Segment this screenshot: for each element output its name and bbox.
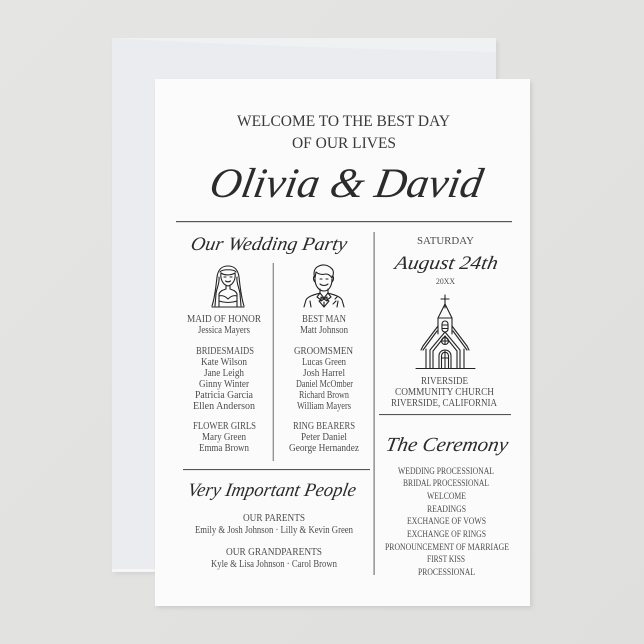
party column divider (273, 263, 274, 461)
panel: wedding party (187, 234, 360, 461)
column: groom's side: GROOMSMEN (294, 346, 353, 357)
column: bride's side: FLOWER GIRLS (193, 421, 256, 432)
date: SATURDAY (417, 235, 474, 247)
venue (391, 376, 498, 409)
venue: RIVERSIDE (421, 376, 468, 387)
column: groom's side: George Hernandez (289, 443, 360, 454)
family names: Kyle & Lisa Johnson · Carol Brown (211, 559, 337, 570)
date: 20XX (436, 277, 455, 286)
date: August 24th (391, 253, 500, 274)
ceremony order list: EXCHANGE OF RINGS (407, 529, 486, 539)
ceremony order list: WEDDING PROCESSIONAL (398, 466, 494, 476)
date (391, 235, 500, 286)
venue rule (379, 414, 511, 415)
family names (195, 513, 353, 570)
column: bride's side: Patricia Garcia (195, 390, 254, 401)
center column divider (374, 232, 375, 575)
ceremony order list: WELCOME (427, 491, 466, 501)
column: groom's side: Peter Daniel (301, 432, 347, 443)
column: groom's side: Josh Harrel (303, 368, 345, 379)
ceremony order list: PROCESSIONAL (418, 567, 475, 577)
ceremony order list: EXCHANGE OF VOWS (407, 516, 486, 526)
column: bride's side: Ginny Winter (199, 379, 250, 390)
column: bride's side: BRIDESMAIDS (196, 346, 254, 357)
icon: groom (304, 265, 344, 307)
ceremony order list: READINGS (427, 504, 466, 514)
icon: church (416, 295, 475, 368)
ceremony order list: PRONOUNCEMENT OF MARRIAGE (385, 542, 509, 552)
column: bride's side: MAID OF HONOR (187, 314, 261, 325)
welcome heading: OF OUR LIVES (292, 135, 396, 152)
column: groom's side: BEST MAN (302, 314, 346, 325)
column: groom's side: Matt Johnson (300, 325, 348, 336)
column: groom's side: Richard Brown (299, 390, 349, 401)
family names: OUR PARENTS (243, 513, 305, 524)
header rule (176, 221, 512, 222)
heading: the ceremony: The Ceremony (384, 434, 510, 456)
panel: the ceremony (384, 434, 510, 577)
column: groom's side: Daniel McOmber (296, 379, 354, 390)
panel: date and venue (391, 235, 500, 409)
ceremony order list: FIRST KISS (427, 554, 465, 564)
envelope behind card (112, 38, 498, 574)
column: bride's side: Mary Green (202, 432, 246, 443)
column: bride's side (187, 314, 261, 454)
ceremony order list (385, 466, 509, 577)
ceremony order list: BRIDAL PROCESSIONAL (403, 478, 489, 488)
welcome heading: WELCOME TO THE BEST DAY (237, 113, 450, 130)
column: groom's side: Lucas Green (302, 357, 346, 368)
welcome heading (237, 113, 450, 152)
couple names: Olivia & David (206, 160, 487, 207)
column: groom's side (289, 314, 360, 454)
section rule (183, 469, 370, 470)
family names: OUR GRANDPARENTS (226, 547, 322, 558)
column: bride's side: Jessica Mayers (198, 325, 250, 336)
venue: RIVERSIDE, CALIFORNIA (391, 398, 498, 409)
column: groom's side: RING BEARERS (293, 421, 355, 432)
venue: COMMUNITY CHURCH (395, 387, 494, 398)
heading: our wedding party: Our Wedding Party (189, 234, 349, 255)
column: bride's side: Emma Brown (199, 443, 249, 454)
invitation card (155, 79, 532, 608)
column: bride's side: Kate Wilson (201, 357, 247, 368)
column: groom's side: William Mayers (297, 401, 351, 412)
family names: Emily & Josh Johnson · Lilly & Kevin Green (195, 525, 353, 536)
panel: very important people (186, 480, 358, 570)
icon: bride (212, 266, 244, 307)
column: bride's side: Jane Leigh (204, 368, 244, 379)
column: bride's side: Ellen Anderson (193, 401, 255, 412)
heading: very important people: Very Important People (186, 480, 358, 501)
